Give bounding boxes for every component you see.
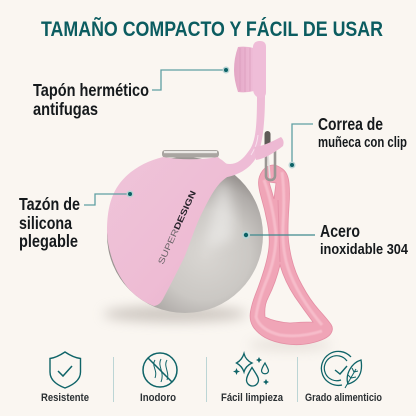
callout: Correa de muñeca con clip: Correa de: [318, 114, 383, 134]
silicone bowl: [107, 157, 236, 306]
callout: Acero inoxidable 304: [242, 221, 409, 258]
callout: Tapón hermético antifugas: [33, 66, 230, 119]
callout: Tapón hermético antifugas: antifugas: [33, 99, 98, 119]
brand on bowl: SUPERDESIGN: [156, 189, 198, 266]
steel sphere: [107, 157, 263, 313]
callout: Tazón de silicona plegable: [19, 190, 134, 251]
divider: [206, 357, 207, 402]
product: bottle with silicone bowl and strap: [103, 41, 332, 350]
callout: Acero inoxidable 304: Acero: [320, 221, 360, 241]
rope loop: [250, 165, 332, 345]
cap: [234, 47, 254, 92]
icon: no odor, Inodoro: [140, 353, 177, 404]
icon: sparkle and drops, Fácil limpieza: [221, 354, 284, 404]
cap strap: [220, 95, 265, 178]
icon: plate and leaf, Grado alimenticio: [305, 351, 382, 404]
strap band: [254, 137, 284, 160]
icon: sparkle and drops, Fácil limpieza: Fácil limpieza: [221, 392, 284, 404]
callout: Tapón hermético antifugas: Tapón hermético: [33, 80, 149, 100]
callout: Correa de muñeca con clip: [288, 114, 407, 168]
icon: no odor, Inodoro: Inodoro: [140, 392, 176, 404]
floor shadow: [103, 306, 247, 322]
icon: shield, Resistente: Resistente: [41, 392, 89, 404]
callout: Tazón de silicona plegable: silicona: [19, 213, 72, 233]
divider: [113, 357, 114, 402]
divider: [297, 357, 298, 402]
icon: shield, Resistente: [41, 352, 89, 404]
icon: plate and leaf, Grado alimenticio: Grado alimenticio: [305, 392, 382, 404]
metal clip: [264, 131, 275, 180]
steel rim: [162, 150, 219, 158]
callout: Tazón de silicona plegable: Tazón de: [19, 194, 80, 214]
callout: Tazón de silicona plegable: plegable: [19, 231, 78, 251]
